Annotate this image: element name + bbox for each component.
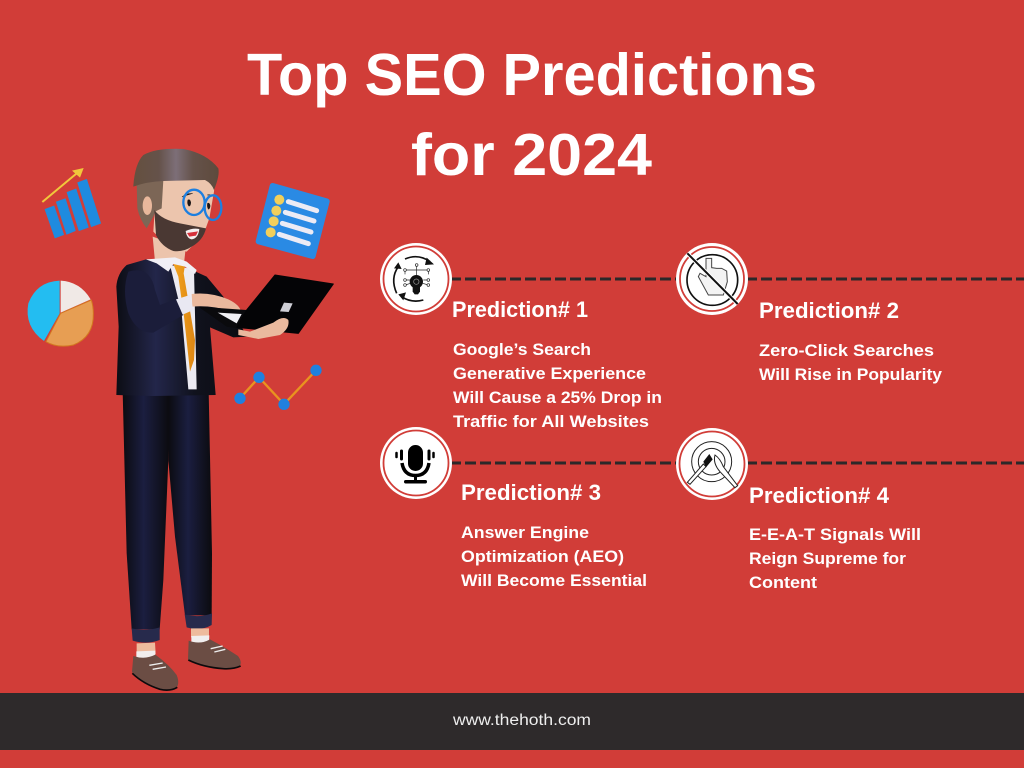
mouth (186, 229, 199, 239)
torso and arms (116, 237, 333, 396)
beard (154, 210, 206, 251)
description: Content (749, 573, 817, 592)
description: E-E-A-T Signals Will (749, 525, 921, 544)
shoes (132, 639, 241, 690)
icon: plate with fork and knife (676, 428, 748, 500)
head (133, 149, 221, 252)
prediction 2 (676, 243, 943, 384)
description: Will Cause a 25% Drop in (453, 388, 662, 407)
heading: Prediction# 4 (749, 483, 890, 508)
icon: rising bar chart (42, 168, 101, 238)
icon: light bulb with cycle arrows (380, 243, 452, 315)
collar (146, 257, 197, 274)
description: Will Rise in Popularity (759, 365, 943, 384)
description: Will Become Essential (461, 571, 647, 590)
description: Reign Supreme for (749, 549, 906, 568)
title: Top SEO Predictions (247, 42, 817, 108)
title: for 2024 (411, 122, 652, 188)
glasses (183, 190, 221, 220)
face (153, 175, 215, 252)
legs (123, 392, 241, 690)
prediction 3 (380, 427, 647, 590)
dashed connector lines (450, 279, 1024, 463)
laptop (198, 275, 333, 333)
description: Google’s Search (453, 340, 591, 359)
hair (133, 149, 219, 190)
prediction 4 (676, 428, 921, 592)
website url: www.thehoth.com (452, 712, 591, 729)
tie (173, 264, 195, 372)
description: Optimization (AEO) (461, 547, 624, 566)
icon: checklist card (259, 186, 327, 256)
heading: Prediction# 1 (452, 297, 588, 322)
description (453, 340, 662, 431)
jacket sleeve (125, 270, 183, 333)
hand under laptop (238, 318, 289, 339)
icon: crossed-out pointing hand (676, 243, 748, 315)
description: Generative Experience (453, 364, 646, 383)
description: Answer Engine (461, 523, 589, 542)
heading: Prediction# 2 (759, 298, 899, 323)
heading: Prediction# 3 (461, 480, 601, 505)
ankles and socks (136, 628, 209, 659)
ear (143, 196, 152, 215)
description: Traffic for All Websites (453, 412, 649, 431)
description (759, 341, 943, 384)
eyes and brows (182, 194, 213, 209)
shirt cuff and forearm (176, 293, 241, 315)
title (247, 42, 817, 188)
footer bar (0, 693, 1024, 750)
prediction 1 (380, 243, 662, 431)
icon: microphone (380, 427, 452, 499)
side hair (137, 180, 163, 228)
description (461, 523, 647, 590)
illustration: businessman with laptop (116, 149, 333, 690)
neck (153, 237, 186, 263)
description (749, 525, 921, 592)
icon: line graph (234, 365, 322, 410)
description: Zero-Click Searches (759, 341, 934, 360)
white shirt (170, 265, 197, 389)
trouser cuffs (132, 613, 212, 643)
jacket (116, 259, 247, 396)
icon: pie chart (28, 281, 93, 346)
